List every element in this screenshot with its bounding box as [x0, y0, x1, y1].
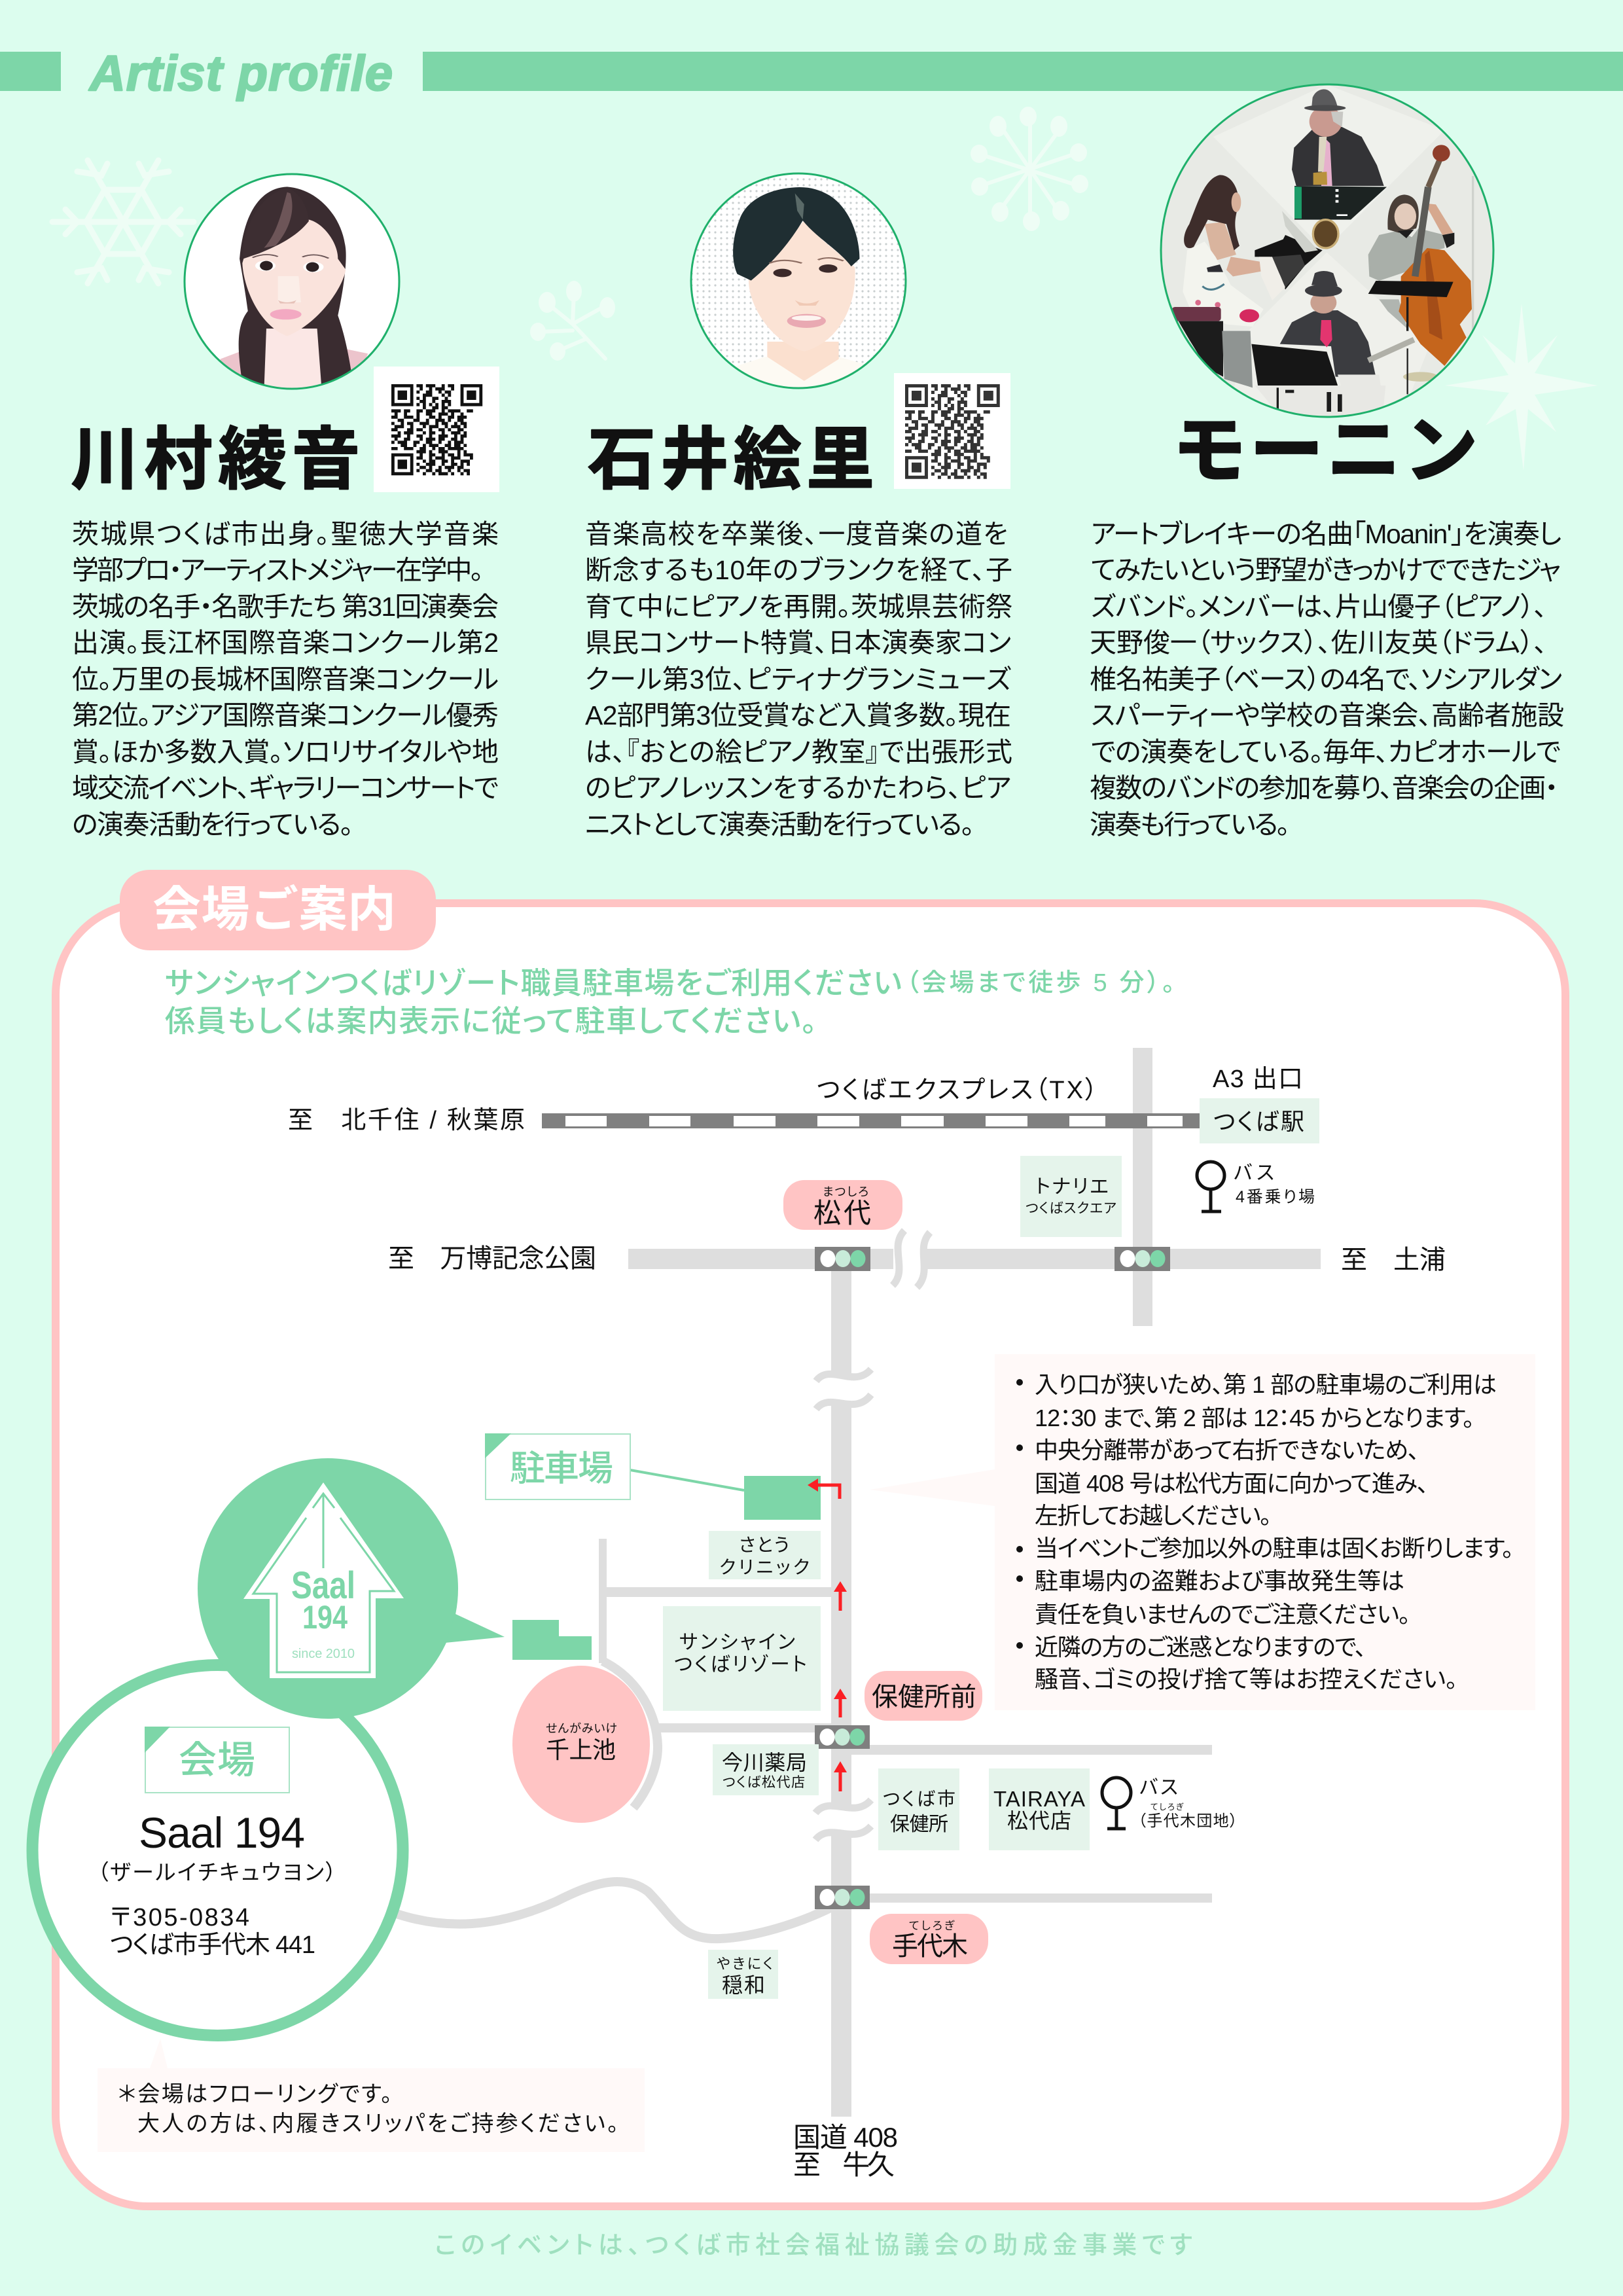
profile text: モーニン: 演奏も行っている。	[1090, 810, 1290, 840]
heading pill: 会場ご案内: 会場ご案内	[152, 882, 396, 937]
profile text: 川村綾音: 茨城県つくば市出身。聖徳大学音楽	[72, 519, 499, 549]
profile text: 石井絵里: 育て中にピアノを再開。茨城県芸術祭	[585, 592, 1012, 622]
callout: parking notes: 12：30 まで、第 2 部は 12：45 からとなります。	[1035, 1405, 1474, 1431]
label: 会場: 会場	[179, 1739, 255, 1782]
arrow: up 1	[834, 1581, 847, 1611]
photo: モーニン band collage	[1161, 84, 1493, 418]
label: A3 出口: A3 出口	[1213, 1066, 1303, 1093]
icon: bus stop 4番乗り場	[1197, 1162, 1315, 1212]
heading: Artist profile: Artist profile	[88, 46, 393, 101]
landmark: TAIRAYA 松代店: TAIRAYA	[993, 1787, 1085, 1811]
label: 駐車場	[485, 1433, 744, 1499]
landmark: 今川薬局: つくば松代店	[722, 1775, 805, 1790]
profile text: 川村綾音: 賞。ほか多数入賞。ソロリサイタルや地	[72, 737, 499, 767]
landmark: やきにく穏和	[708, 1950, 778, 1999]
landmark: サンシャインつくばリゾート	[663, 1606, 821, 1711]
photo: 石井絵里 portrait	[691, 173, 906, 390]
bassist	[1368, 145, 1472, 366]
landmark: やきにく穏和: 穏和	[722, 1973, 765, 1997]
icon: bus stop 手代木団地	[1102, 1777, 1238, 1830]
landmark: つくば市保健所: つくば市	[883, 1789, 955, 1809]
bubble: Saal 194 logo	[198, 1458, 505, 1719]
callout: parking notes: 左折してお越しください。	[1035, 1502, 1272, 1529]
callout: parking notes: 騒音、ゴミの投げ捨て等はお控えください。	[1035, 1666, 1457, 1693]
note: flooring and slippers: 大人の方は、内履きスリッパをご持参ください。	[137, 2111, 618, 2136]
decoration: snowflake	[52, 160, 194, 283]
icon: bus stop 手代木団地: （手代木団地）	[1138, 1812, 1238, 1830]
label: 至 万博記念公園: 至 万博記念公園	[388, 1244, 596, 1273]
header band: Artist profile	[0, 46, 1623, 101]
station box: つくば駅: つくば駅	[1213, 1108, 1304, 1135]
landmark: つくば市保健所: 保健所	[890, 1814, 948, 1835]
landmark: 今川薬局: 今川薬局	[722, 1751, 807, 1774]
profile text: 石井絵里: 断念するも10年のブランクを経て、子	[585, 555, 1012, 585]
parking notice: サンシャインつくばリゾート職員駐車場をご利用ください	[165, 966, 902, 1000]
landmark: サンシャインつくばリゾート: つくばリゾート	[674, 1654, 807, 1676]
profile text: 石井絵里: クール第3位、ピティナグランミューズ	[585, 664, 1012, 694]
decoration: burst	[971, 107, 1088, 231]
label: 国道 408 至 牛久	[793, 2122, 898, 2180]
landmark: さとうクリニック: クリニック	[719, 1557, 810, 1577]
venue name: Saal 194	[139, 1808, 305, 1857]
profile text: モーニン: 椎名祐美子（ベース）の4名で、ソシアルダン	[1090, 664, 1562, 694]
logo: house arrow: 194	[302, 1599, 348, 1636]
sax player	[1292, 89, 1387, 248]
traffic light: 松代	[815, 1247, 870, 1271]
profile text: モーニン: アートブレイキーの名曲「Moanin'」を演奏し	[1091, 519, 1561, 549]
profile text: 石井絵里: A2部門第3位受賞など入賞多数。現在	[585, 700, 1011, 730]
callout: parking notes: 当イベントご参加以外の駐車は固くお断りします。	[1035, 1535, 1514, 1562]
lake: 千上池: せんがみいけ	[546, 1722, 617, 1735]
arrow: up 2	[834, 1689, 847, 1717]
profile text: モーニン: ズバンド。メンバーは、片山優子（ピアノ）、	[1091, 592, 1547, 622]
QR code: 川村綾音	[374, 367, 499, 492]
place pill: 手代木: てしろぎ	[909, 1920, 955, 1932]
railway: Tsukuba Express	[542, 1113, 1200, 1128]
callout: parking notes: 近隣の方のご迷惑となりますので、	[1035, 1634, 1366, 1660]
address	[110, 1904, 315, 1959]
icon: bus stop 手代木団地: バス	[1139, 1777, 1178, 1799]
panel: venue guide	[56, 903, 1565, 2206]
QR code: 石井絵里	[894, 373, 1010, 489]
profile text: 石井絵里: 音楽高校を卒業後、一度音楽の道を	[585, 519, 1008, 549]
landmark: つくば市保健所	[878, 1768, 959, 1850]
traffic light: 手代木	[815, 1886, 870, 1909]
venue circle: Saal 194 address	[33, 1665, 403, 2036]
station box: つくば駅	[1200, 1098, 1319, 1143]
venue reading: （ザールイチキュウヨン）	[98, 1860, 336, 1884]
profile text: 川村綾音: 域交流イベント、ギャラリーコンサートで	[72, 773, 499, 803]
label: 至 土浦: 至 土浦	[1341, 1246, 1446, 1274]
label: 国道 408 至 牛久: 至 牛久	[793, 2149, 895, 2180]
place pill: 松代: まつしろ	[823, 1185, 868, 1198]
map: roads	[393, 1048, 1321, 2117]
landmark: トナリエ: トナリエ	[1035, 1176, 1109, 1198]
callout: parking notes	[870, 1354, 1535, 1710]
place pill: 松代	[783, 1180, 902, 1230]
landmark: トナリエ: つくばスクエア	[1026, 1201, 1116, 1216]
profile text: 川村綾音	[72, 519, 499, 840]
label: 国道 408 至 牛久: 国道 408	[793, 2122, 898, 2153]
address: 〒305-0834	[110, 1904, 249, 1931]
pianist	[1172, 175, 1323, 387]
landmark: TAIRAYA 松代店	[989, 1768, 1090, 1850]
landmark: TAIRAYA 松代店: 松代店	[1007, 1809, 1071, 1833]
traffic light: station road	[1115, 1247, 1170, 1271]
decoration: star	[1445, 304, 1597, 471]
profile text: 川村綾音: 出演。長江杯国際音楽コンクール第2	[72, 628, 499, 658]
landmark: やきにく穏和: やきにく	[717, 1956, 773, 1972]
profile text: モーニン: 複数のバンドの参加を募り、音楽会の企画・	[1090, 773, 1558, 803]
arrow: up 3	[834, 1761, 847, 1791]
profile text: モーニン: での演奏をしている。毎年、カピオホールで	[1091, 737, 1561, 767]
icon: bus stop 手代木団地: てしろぎ	[1150, 1803, 1184, 1812]
profile text: 川村綾音: 位。万里の長城杯国際音楽コンクール	[72, 664, 499, 694]
parking notice: （会場まで徒歩 5 分）。	[906, 969, 1175, 997]
icon: bus stop 4番乗り場: バス	[1234, 1162, 1274, 1184]
callout: parking notes: 中央分離帯があって右折できないため、	[1035, 1437, 1419, 1463]
drummer	[1251, 271, 1438, 418]
parking notice	[165, 966, 1175, 1038]
profile text: モーニン: てみたいという野望がきっかけでできたジャ	[1091, 555, 1561, 585]
name: モーニン: モーニン	[1173, 410, 1478, 492]
place pill: 手代木	[870, 1914, 988, 1964]
footer: grant notice: このイベントは、つくば市社会福祉協議会の助成金事業です	[435, 2232, 1192, 2259]
landmark: 今川薬局	[713, 1744, 819, 1795]
logo: house arrow: Saal	[291, 1564, 355, 1607]
callout: parking notes: 責任を負いませんのでご注意ください。	[1035, 1601, 1410, 1628]
address: つくば市手代木 441	[110, 1931, 315, 1959]
profile text: 石井絵里: のピアノレッスンをするかたわら、ピア	[585, 773, 1011, 803]
profile text: 石井絵里: ニストとして演奏活動を行っている。	[585, 810, 974, 840]
parking notice: 係員もしくは案内表示に従って駐車してください。	[165, 1004, 817, 1038]
profile text: 石井絵里	[585, 519, 1012, 840]
logo: house arrow: since 2010	[292, 1647, 355, 1661]
lake: 千上池: 千上池	[546, 1736, 616, 1763]
logo: house arrow	[243, 1482, 404, 1678]
parking lot	[744, 1476, 821, 1520]
label: 会場	[145, 1727, 289, 1793]
landmark: サンシャインつくばリゾート: サンシャイン	[679, 1632, 795, 1653]
profile text: モーニン: 天野俊一（サックス）、佐川友英（ドラム）、	[1090, 628, 1547, 658]
venue building	[512, 1620, 592, 1660]
heading pill: 会場ご案内	[120, 870, 436, 950]
profile text: 川村綾音: 第2位。アジア国際音楽コンクール優秀	[72, 700, 499, 730]
note: flooring and slippers: ＊会場はフローリングです。	[118, 2082, 392, 2107]
landmark: トナリエ	[1020, 1156, 1122, 1237]
label: 至 北千住 / 秋葉原: 至 北千住 / 秋葉原	[288, 1107, 525, 1134]
callout: parking notes: 入り口が狭いため、第 1 部の駐車場のご利用は	[1035, 1371, 1497, 1398]
place pill: 手代木: 手代木	[892, 1932, 968, 1961]
label: つくばエクスプレス: つくばエクスプレス（TX）	[817, 1077, 1097, 1104]
icon: bus stop 4番乗り場: 4番乗り場	[1236, 1188, 1315, 1206]
label: 駐車場: 駐車場	[510, 1449, 613, 1488]
place pill: 松代: 代	[844, 1198, 871, 1229]
name: 川村綾音: 川村綾音	[71, 422, 360, 498]
profile text: 川村綾音: 学部プロ・アーティストメジャー在学中。	[72, 555, 484, 585]
landmark: さとうクリニック	[709, 1531, 821, 1579]
callout: parking notes: 国道 408 号は松代方面に向かって進み、	[1035, 1470, 1429, 1497]
note: flooring and slippers	[98, 2039, 645, 2152]
profile text: 石井絵里: 県民コンサート特賞、日本演奏家コン	[585, 628, 1011, 658]
photo: 川村綾音 portrait	[185, 174, 399, 390]
name: 石井絵里: 石井絵里	[588, 422, 874, 498]
profile text: モーニン	[1090, 519, 1564, 840]
profile text: 川村綾音: 茨城の名手・名歌手たち 第31回演奏会	[72, 592, 499, 622]
profile text: モーニン: スパーティーや学校の音楽会、高齢者施設	[1091, 700, 1564, 730]
place pill: 松代: 松	[813, 1198, 841, 1229]
traffic light: 保健所前	[815, 1725, 870, 1749]
profile text: 石井絵里: は、『おとの絵ピアノ教室』で出張形式	[585, 737, 1012, 767]
arrow: turn left into parking	[808, 1479, 840, 1499]
profile text: 川村綾音: の演奏活動を行っている。	[72, 810, 353, 840]
callout: parking notes: 駐車場内の盗難および事故発生等は	[1035, 1568, 1404, 1594]
decoration: sprig	[530, 281, 615, 361]
place pill: 保健所前	[865, 1671, 982, 1721]
lake: 千上池	[512, 1666, 650, 1823]
place pill: 保健所前: 保健所前	[872, 1683, 976, 1712]
landmark: さとうクリニック: さとう	[739, 1535, 789, 1555]
